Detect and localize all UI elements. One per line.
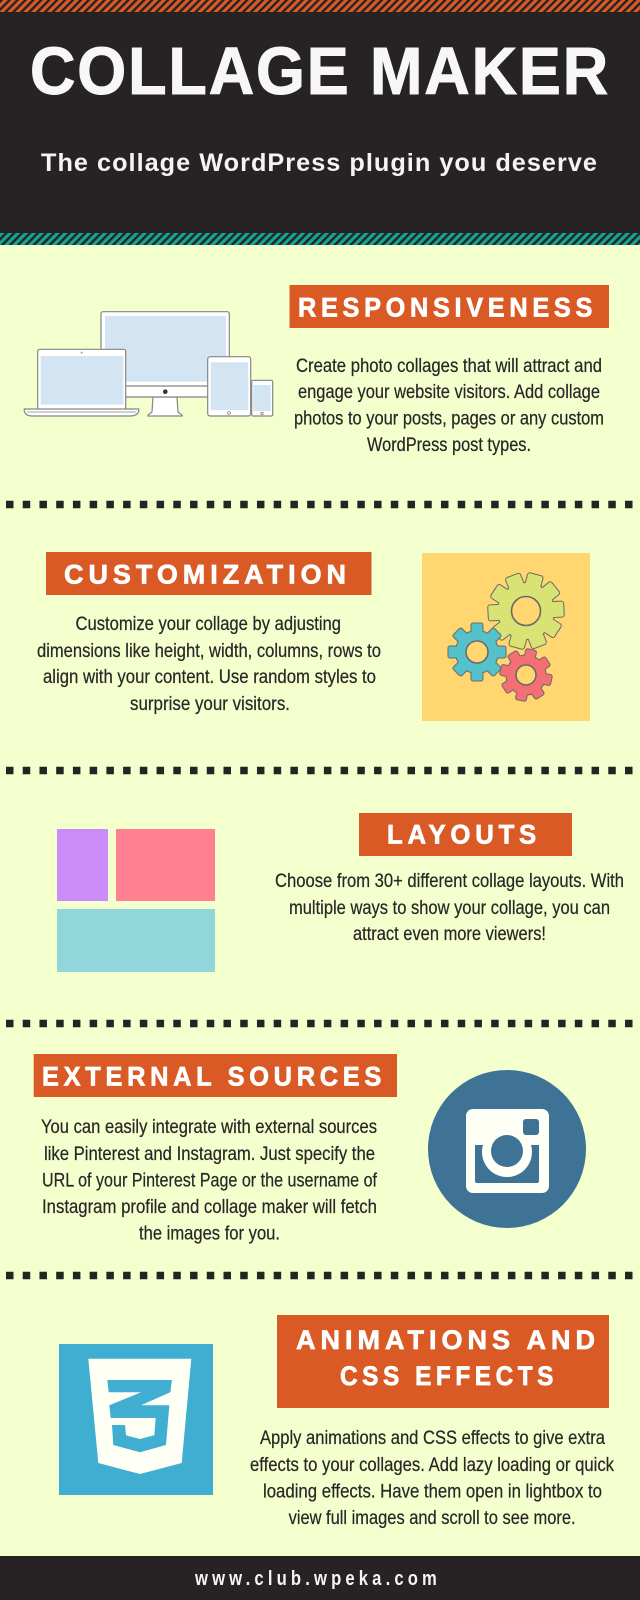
icon: responsive devices (24, 312, 273, 416)
body text: external sources: Instagram profile and collage maker will fetch (42, 1197, 377, 1218)
body text: animations: view full images and scroll to see more. (289, 1508, 576, 1529)
gear: red (496, 645, 556, 705)
gear: teal (448, 624, 506, 680)
icon: css3 (59, 1344, 213, 1495)
divider 3 (6, 1020, 634, 1027)
body text: responsiveness: Create photo collages that will attract and (296, 356, 602, 377)
divider 4 (6, 1272, 634, 1279)
body text: external sources: You can easily integrate with external sources (41, 1117, 377, 1138)
body text: customization: surprise your visitors. (130, 694, 290, 715)
divider 1 (6, 501, 634, 508)
body text: customization: align with your content. Use random styles to (43, 667, 376, 688)
divider 2 (6, 767, 634, 774)
section: animations and css effects (59, 1315, 614, 1529)
body text: layouts (275, 871, 624, 945)
body text: customization: Customize your collage by adjusting (76, 614, 341, 635)
subtitle: The collage WordPress plugin you deserve (41, 149, 598, 177)
heading: responsiveness: RESPONSIVENESS (298, 292, 597, 322)
body text: external sources: URL of your Pinterest Page or the username of (42, 1170, 378, 1192)
heading: external sources (34, 1054, 397, 1097)
body text: responsiveness: engage your website visitors. Add collage (298, 382, 600, 403)
body text: layouts: attract even more viewers! (353, 924, 546, 945)
footer bar (0, 1556, 640, 1600)
heading: animations and css effects (277, 1315, 609, 1408)
heading: customization (46, 552, 372, 595)
footer bar: www.club.wpeka.com (194, 1568, 441, 1590)
gear: green (480, 565, 572, 657)
heading: layouts (359, 813, 572, 856)
heading: responsiveness (290, 285, 609, 328)
body text: responsiveness (294, 356, 604, 456)
body text: customization (37, 614, 381, 715)
body text: external sources (41, 1117, 378, 1244)
icon: layout tiles (57, 829, 215, 972)
header banner (0, 0, 640, 245)
section: external sources (34, 1054, 586, 1244)
heading: customization: CUSTOMIZATION (64, 560, 351, 590)
body text: animations (250, 1428, 614, 1529)
heading: animations and css effects: CSS EFFECTS (340, 1361, 558, 1391)
heading: layouts: LAYOUTS (387, 820, 541, 850)
heading: animations and css effects: ANIMATIONS AND (296, 1325, 600, 1355)
body text: responsiveness: WordPress post types. (367, 435, 531, 456)
heading: external sources: EXTERNAL SOURCES (42, 1062, 386, 1092)
section: responsiveness (24, 285, 609, 456)
section: layouts (57, 813, 624, 972)
body text: customization: dimensions like height, width, columns, rows to (37, 641, 381, 662)
title: COLLAGE MAKER (30, 34, 610, 109)
icon: gears (422, 553, 590, 721)
body text: external sources: like Pinterest and Instagram. Just specify the (44, 1144, 375, 1165)
icon: instagram (428, 1070, 586, 1228)
body text: animations: loading effects. Have them open in lightbox to (263, 1482, 602, 1502)
section: customization (37, 552, 590, 721)
body text: external sources: the images for you. (139, 1224, 280, 1244)
